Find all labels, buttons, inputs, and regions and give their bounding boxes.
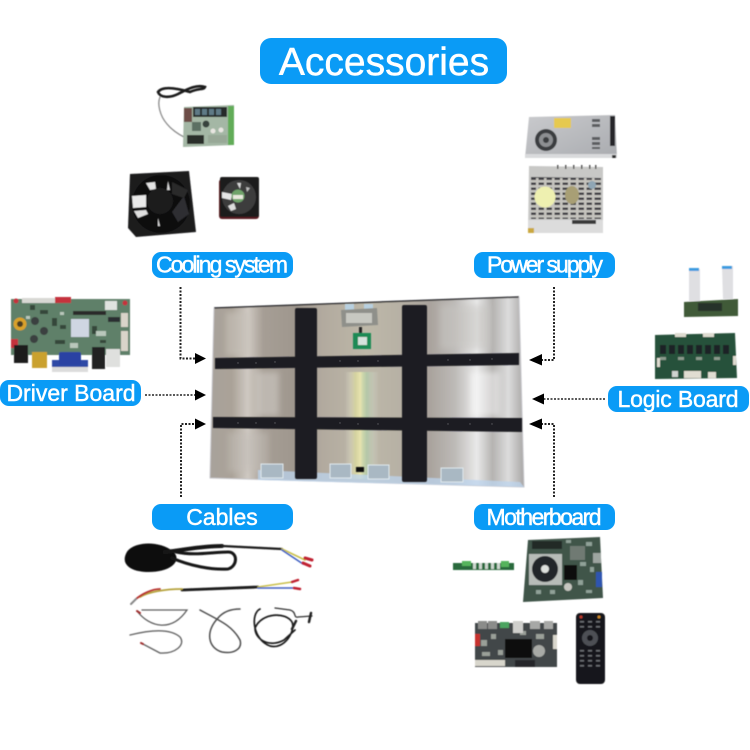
label: Cables <box>152 504 293 530</box>
label: Logic Board: Logic Board <box>618 386 738 412</box>
icon: green circuit board <box>11 297 130 368</box>
arrow: cooling system to panel <box>180 287 206 364</box>
arrow: logic board to panel <box>532 394 605 404</box>
image: cables <box>126 544 312 653</box>
icon: ribbon cables on small board <box>684 266 738 317</box>
icon: motherboard with heatsink <box>523 537 603 602</box>
icon: closed power supply <box>525 115 617 158</box>
arrow: power supply to panel <box>529 287 554 366</box>
icon: VGA connector <box>52 352 88 372</box>
icon: small fan <box>219 177 259 219</box>
label: Power supply: Power supply <box>487 252 604 278</box>
label: Cooling system: Cooling system <box>156 252 288 278</box>
label: Motherboard: Motherboard <box>486 504 602 530</box>
chart marks: screws along bars <box>237 358 493 425</box>
icon: large logic board <box>655 333 737 379</box>
label: Cables: Cables <box>186 504 258 530</box>
image: motherboards and remote <box>453 537 605 684</box>
icon: logic board on panel <box>341 304 378 349</box>
panel: metal backing <box>210 297 524 487</box>
arrow: driver board to panel <box>145 390 206 400</box>
arrow: motherboard to panel <box>529 418 554 497</box>
icon: bottom connectors on panel <box>261 464 463 482</box>
image: driver board <box>11 297 130 372</box>
icon: remote control <box>576 613 605 684</box>
panel: black cross bars <box>213 305 522 482</box>
image: logic boards <box>655 266 738 379</box>
icon: black coiled power cable <box>126 544 312 571</box>
image: power supply units <box>525 115 617 233</box>
icon: second power cable <box>131 580 300 604</box>
title: Accessories: Accessories <box>279 41 489 84</box>
icon: large fan <box>128 171 196 237</box>
icon: thermostat board <box>183 105 234 147</box>
icon: grey thin cable pair <box>130 610 187 653</box>
icon: open power supply mesh <box>528 165 603 233</box>
icon: audio and USB ports <box>92 347 120 369</box>
main panel: display back <box>210 297 524 487</box>
label: Driver Board: Driver Board <box>6 380 136 406</box>
image: cooling system thermostat and fans <box>128 86 259 237</box>
icon: compact motherboard <box>475 621 557 667</box>
icon: small connector strip <box>453 561 514 570</box>
icon: black loop cable <box>254 608 312 647</box>
icon: thermostat wire <box>158 86 205 137</box>
icon: grey loop cable <box>200 609 241 652</box>
arrow: cables to panel <box>181 418 206 497</box>
